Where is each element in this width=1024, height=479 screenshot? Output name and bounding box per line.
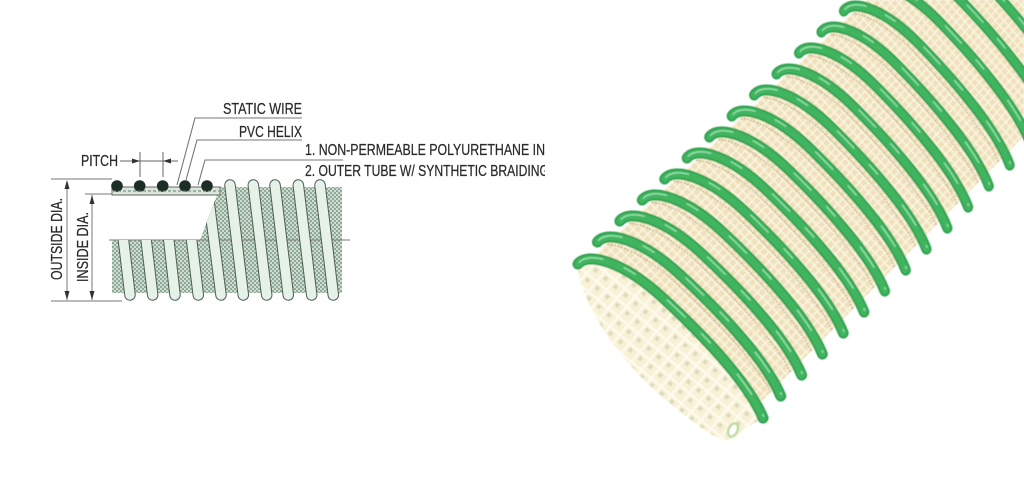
cutaway tube wall — [112, 187, 220, 195]
outside diameter dimension: OUTSIDE DIA. — [49, 198, 66, 280]
centre line — [109, 239, 350, 241]
hose mouth mesh — [578, 264, 762, 441]
hose cross-section drawing — [109, 180, 350, 295]
layers label: 1. NON-PERMEABLE POLYURETHANE IN — [305, 142, 545, 159]
helix coils — [117, 185, 333, 295]
construction diagram — [49, 101, 549, 301]
hose body — [598, 0, 1024, 405]
shadow lines under coils — [591, 13, 1003, 403]
pvc helix label: PVC HELIX — [239, 124, 303, 141]
layers label: 2. OUTER TUBE W/ SYNTHETIC BRAIDING — [305, 163, 549, 180]
pitch dimension: PITCH — [81, 153, 118, 170]
inner wall dashes — [113, 190, 219, 192]
static wire dots — [111, 180, 213, 192]
outside diameter dimension — [49, 179, 122, 301]
coil end loop — [726, 422, 740, 438]
photo of green helix hose — [578, 0, 1024, 441]
inside diameter dimension — [75, 194, 112, 300]
braided hose wall — [112, 187, 342, 293]
layers label — [198, 142, 549, 185]
pvc helix label — [186, 124, 303, 180]
static wire label: STATIC WIRE — [223, 101, 302, 118]
pitch dimension — [81, 152, 178, 177]
inside diameter dimension: INSIDE DIA. — [75, 212, 92, 282]
static wire label — [177, 101, 302, 185]
braided bands between coils — [586, 0, 1024, 406]
green coils — [578, 0, 1024, 418]
